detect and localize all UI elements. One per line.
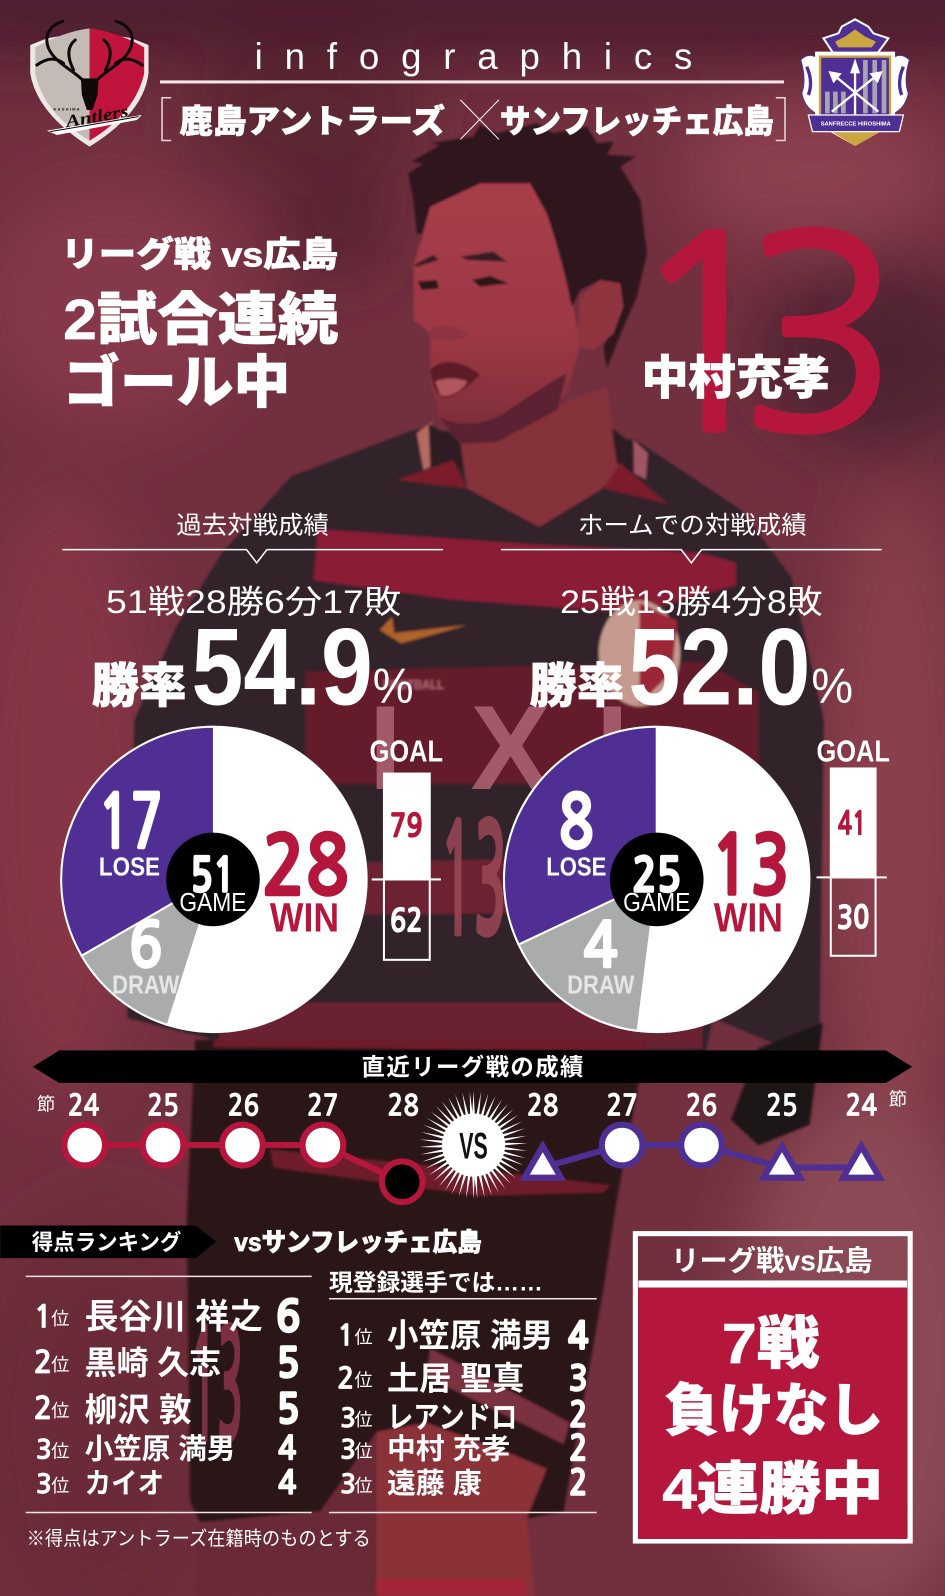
section heading: all matches: 過去対戦成績 [176, 512, 329, 539]
ranking table: current squad: レアンドロ [387, 1401, 517, 1435]
ranking table: all-time: 5 [277, 1344, 299, 1384]
match heading: サンフレッチェ広島 [500, 103, 774, 139]
ranking table: all-time: 4 [278, 1433, 296, 1465]
goal bar: all matches: GOAL [370, 734, 443, 768]
crest: Kashima Antlers: KASHIMA [54, 107, 80, 112]
headline: consecutive goals: リーグ戦 vs広島 [61, 236, 338, 275]
player number and name: 中村充孝 [641, 352, 830, 404]
ranking table: current squad: 土居 聖真 [387, 1360, 524, 1396]
glove [731, 1023, 823, 1145]
shirt lettering: 13 [440, 806, 507, 957]
ranking table: all-time: 2 [34, 1393, 52, 1424]
section heading: home matches [501, 512, 882, 563]
record: all matches: 51戦28勝6分17敗 [106, 584, 401, 620]
ranking table: current squad: 4 [568, 1319, 589, 1355]
goal bar: home matches: 30 [837, 901, 869, 933]
pie chart: all matches: DRAW [112, 971, 179, 999]
ranking table: all-time [26, 1276, 312, 1513]
timeline: Hiroshima results: 26 [686, 1093, 717, 1121]
section heading: home matches: ホームでの対戦成績 [578, 512, 807, 539]
shirt lettering [191, 681, 629, 1463]
ranking table: current squad: 位 [354, 1409, 373, 1430]
crest: Kashima Antlers: Antlers [63, 101, 130, 131]
headline: consecutive goals [61, 236, 338, 415]
ranking table: current squad: 3 [340, 1405, 356, 1431]
record: all matches [92, 584, 413, 728]
shirt lettering: I [596, 681, 629, 815]
ranking table: current squad: 2 [569, 1467, 588, 1501]
goal bar: home matches: GOAL [817, 734, 890, 768]
record: home matches: % [811, 659, 853, 713]
crest: Sanfrecce Hiroshima: SANFRECCE HIROSHIMA [821, 122, 891, 128]
ranking table: all-time: 6 [276, 1296, 300, 1338]
ranking table: current squad: 遠藤 康 [387, 1468, 482, 1500]
record: home matches [530, 584, 853, 728]
ranking table: current squad: 2 [337, 1365, 354, 1393]
player jersey [127, 430, 824, 1069]
player number and name: 1 [625, 203, 787, 469]
pie chart: all matches: LOSE [99, 853, 160, 881]
goal bar: home matches [817, 734, 890, 956]
ranking table: all-time: 位 [51, 1308, 69, 1329]
pie chart: all matches: WIN [270, 894, 339, 940]
pie chart: all matches: 17 [98, 786, 163, 859]
ranking table: all-time: 位 [51, 1441, 69, 1462]
ranking table: all-time: 位 [51, 1400, 69, 1421]
shirt lettering: X [470, 681, 551, 815]
title: infographics: infographics [255, 36, 692, 77]
footnote: ※得点はアントラーズ在籍時のものとする [27, 1528, 371, 1550]
headline: consecutive goals: 2試合連続 [63, 288, 338, 352]
pie chart: home matches: 25 [632, 853, 681, 899]
pie chart: home matches: GAME [623, 889, 690, 917]
ranking table: all-time: 長谷川 祥之 [85, 1298, 263, 1336]
ranking table: all-time: 黒崎 久志 [85, 1345, 221, 1381]
timeline: Hiroshima results [524, 1088, 907, 1178]
ranking heading: 得点ランキング [32, 1229, 181, 1255]
timeline: Hiroshima results: 28 [527, 1093, 559, 1121]
ranking table: all-time: 4 [278, 1467, 296, 1499]
crest: Sanfrecce Hiroshima [801, 19, 909, 146]
player neck and collar [397, 387, 667, 527]
pie chart: all matches: GAME [179, 889, 247, 917]
ranking table: all-time: 5 [277, 1390, 299, 1430]
pie chart: home matches: 13 [711, 828, 790, 908]
panel: unbeaten run callout: リーグ戦vs広島 [671, 1244, 873, 1277]
ranking table: current squad: 位 [354, 1327, 373, 1348]
record: all matches: 勝率 [92, 660, 186, 713]
goal bar: all matches: 62 [390, 904, 423, 936]
panel: unbeaten run callout: 7戦 [722, 1312, 820, 1376]
ranking table: current squad: 2 [569, 1399, 588, 1433]
title rule [160, 80, 784, 83]
ranking heading: vsサンフレッチェ広島 [234, 1229, 482, 1257]
player number and name: 3 [739, 203, 901, 469]
banner: recent league results: 直近リーグ戦の成績 [362, 1053, 583, 1080]
record: home matches: 52.0 [628, 605, 810, 728]
record: all matches: % [373, 659, 413, 713]
player jersey: FOOTBALL [383, 677, 444, 692]
timeline: Hiroshima results: 節 [889, 1088, 907, 1109]
ranking table: all-time: 位 [51, 1475, 69, 1496]
headline: consecutive goals: ゴール中 [63, 351, 290, 415]
ranking table: current squad: 現登録選手では…… [329, 1270, 543, 1296]
banner: recent league results [33, 1050, 912, 1083]
player head [409, 123, 647, 443]
ranking table: all-time: 位 [51, 1354, 69, 1375]
pie chart: all matches: 28 [262, 828, 349, 908]
section heading: all matches [62, 512, 443, 563]
record: home matches: 25戦13勝4分8敗 [560, 584, 823, 620]
pie chart: home matches [503, 726, 810, 1033]
timeline: Hiroshima results: 24 [846, 1093, 877, 1121]
crest: Kashima Antlers [30, 21, 149, 147]
pie chart: all matches: 51 [191, 853, 235, 899]
icon: VS starburst: VS [459, 1125, 488, 1166]
pie chart: all matches: 6 [129, 917, 163, 977]
ranking heading [0, 1226, 482, 1258]
shirt lettering: 13 [191, 1312, 243, 1463]
timeline: Kashima results: 28 [388, 1093, 419, 1121]
match heading [162, 98, 785, 140]
goal bar: all matches [370, 734, 443, 960]
timeline: Kashima results: 24 [68, 1093, 99, 1121]
match heading: 鹿島アントラーズ [179, 102, 445, 139]
pie chart: home matches: 8 [559, 786, 594, 859]
ranking table: current squad [329, 1270, 597, 1513]
ranking table: all-time: 小笠原 満男 [85, 1434, 235, 1466]
ranking table: all-time: 1 [34, 1301, 52, 1332]
panel: unbeaten run callout: 4連勝中 [662, 1457, 883, 1521]
icon: VS starburst [419, 1091, 528, 1199]
ranking table: current squad: 位 [354, 1369, 373, 1390]
shirt lettering: I [369, 681, 402, 815]
timeline: Kashima results: 節 [37, 1093, 55, 1114]
ranking table: current squad: 1 [337, 1323, 354, 1351]
ranking table: current squad: 位 [354, 1441, 373, 1462]
ranking table: current squad: 中村 充孝 [387, 1434, 510, 1466]
ranking table: current squad: 3 [569, 1362, 588, 1396]
record: home matches: 勝率 [529, 660, 624, 713]
ranking table: all-time: 3 [36, 1471, 52, 1497]
ranking table: current squad: 2 [569, 1433, 588, 1467]
panel: unbeaten run callout [635, 1234, 910, 1541]
pie chart: home matches: DRAW [567, 971, 634, 999]
goal bar: home matches: 41 [838, 808, 866, 840]
goal bar: all matches: 79 [390, 810, 423, 842]
timeline: Hiroshima results: 25 [766, 1093, 798, 1121]
panel: unbeaten run callout: 負けなし [664, 1379, 883, 1443]
pie chart: home matches: 4 [583, 917, 618, 977]
ranking table: all-time: 柳沢 敦 [85, 1392, 192, 1428]
ranking table: current squad: 3 [340, 1437, 356, 1463]
ranking table: current squad: 小笠原 満男 [387, 1318, 553, 1354]
timeline: Kashima results [37, 1093, 423, 1202]
ranking table: current squad: 位 [354, 1475, 373, 1496]
timeline: Hiroshima results: 27 [606, 1093, 638, 1121]
ranking table: all-time: 2 [34, 1347, 52, 1378]
player number and name [625, 203, 901, 469]
pie chart: home matches: LOSE [546, 853, 606, 881]
record: all matches: 54.9 [192, 605, 373, 728]
timeline: Kashima results: 26 [228, 1093, 259, 1121]
player figure [127, 387, 824, 1596]
ranking table: all-time: カイオ [85, 1468, 164, 1500]
player shorts and legs [187, 1040, 647, 1596]
pie chart: all matches [60, 726, 368, 1033]
ranking table: all-time: 3 [36, 1437, 52, 1463]
pie chart: home matches: WIN [714, 894, 783, 940]
timeline: Kashima results: 25 [147, 1093, 179, 1121]
timeline: Kashima results: 27 [307, 1093, 339, 1121]
ranking table: current squad: 3 [340, 1471, 356, 1497]
